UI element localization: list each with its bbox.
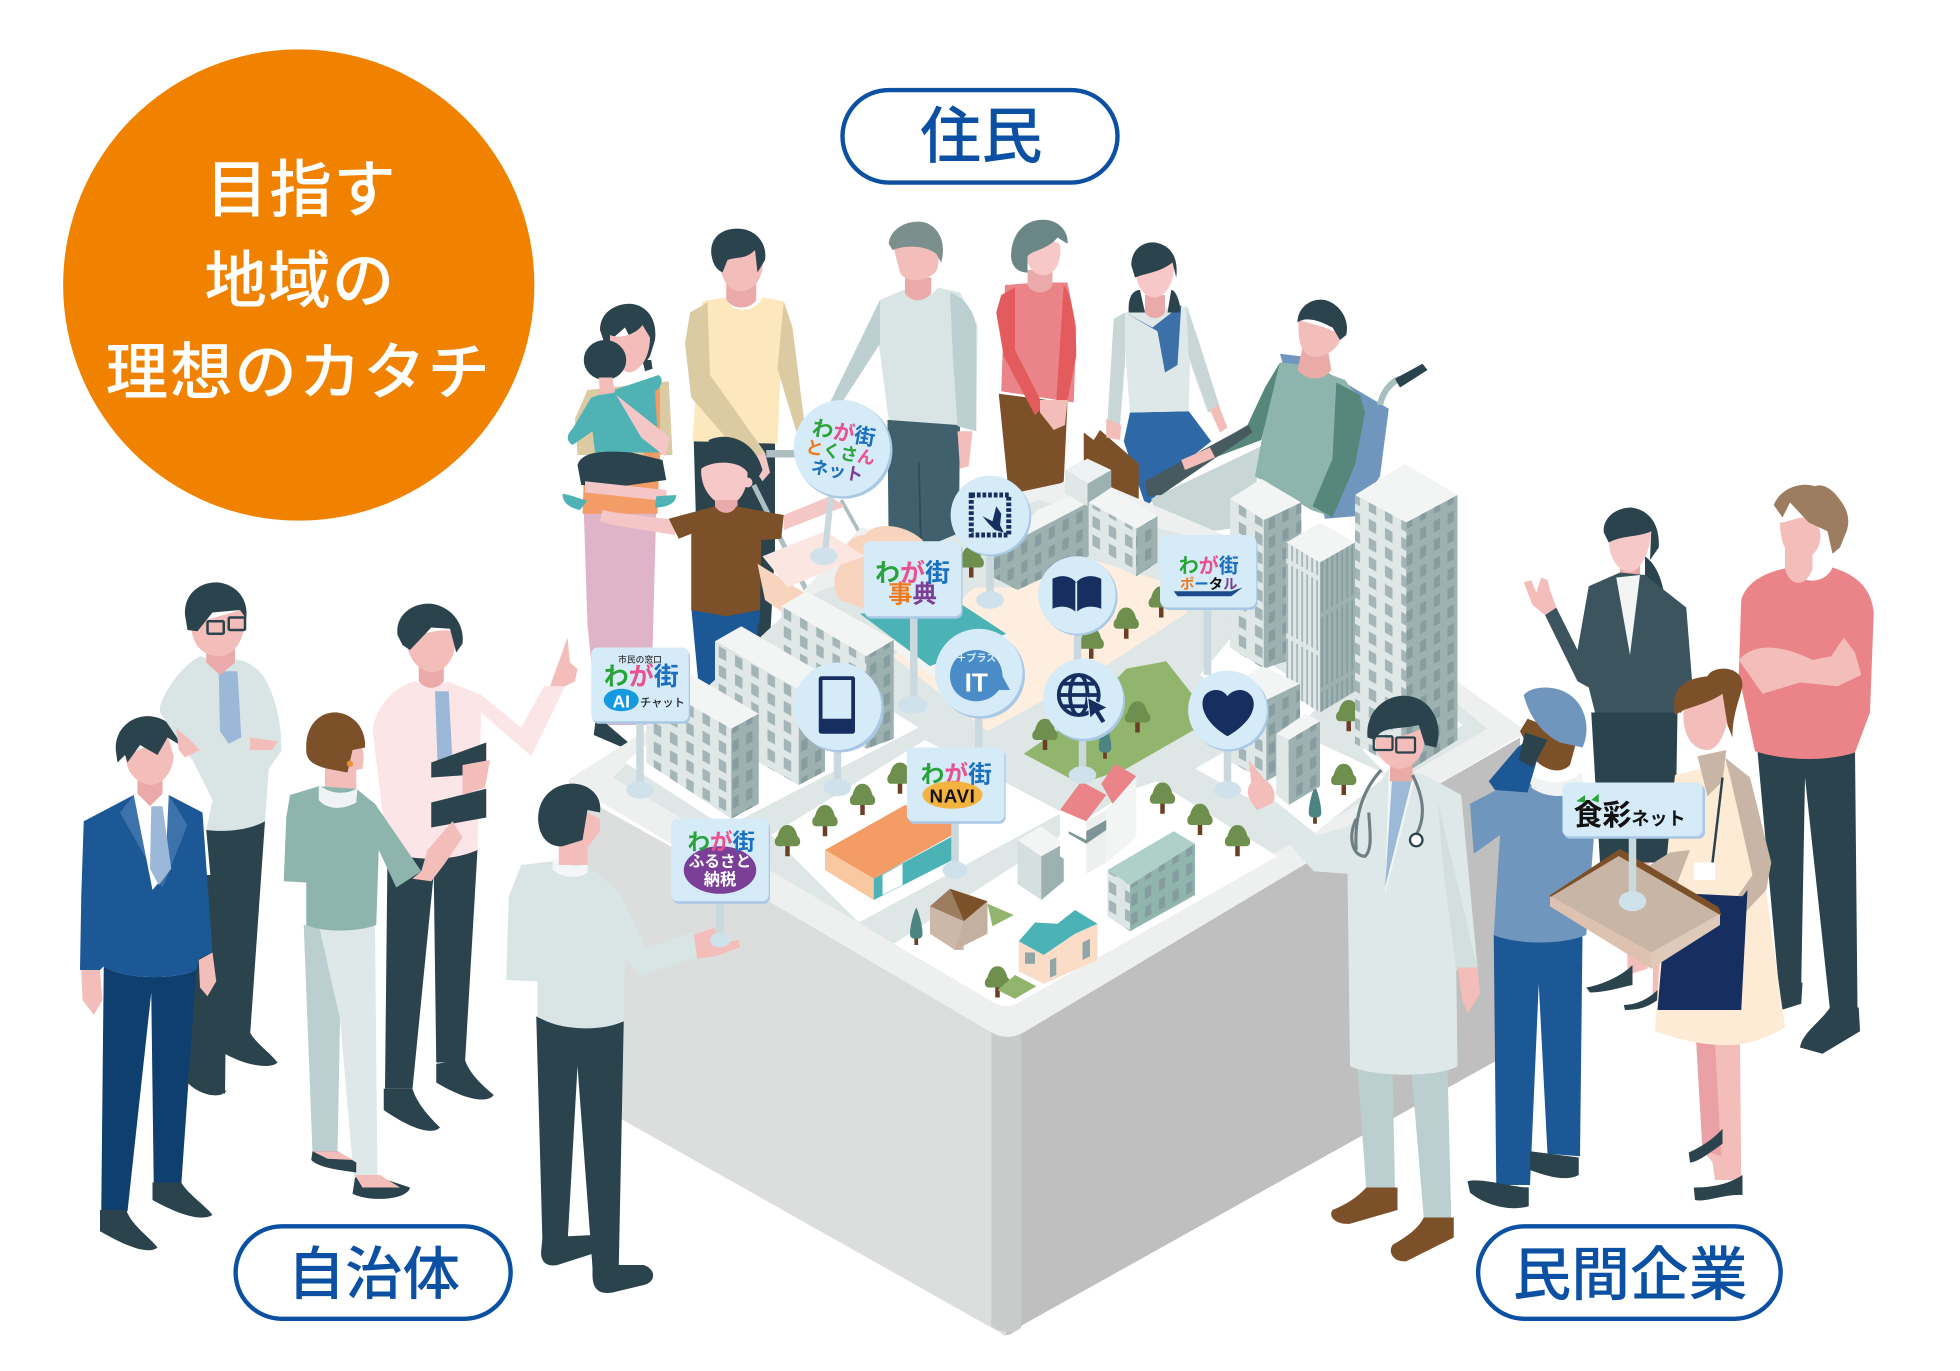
person: elderly man with walker — [830, 222, 978, 556]
building: front apartment — [646, 665, 759, 819]
building: middle apartment — [715, 626, 825, 785]
building: orange-roof store — [825, 805, 952, 900]
label: residents — [842, 90, 1118, 182]
sign: heart icon — [1188, 671, 1269, 799]
building: tower 1 — [1230, 479, 1301, 669]
sign: わが街ポータル — [1160, 535, 1258, 675]
sign: わが街事典: わが街 — [875, 558, 950, 587]
sign: わが街ポータル: わが街 — [1179, 553, 1239, 578]
sign: わが街NAVI: わが街 — [921, 760, 992, 789]
walker frame — [754, 454, 859, 592]
sign: わが街ふるさと納税: わが街 — [687, 829, 755, 855]
wheelchair frame — [1280, 354, 1389, 519]
person: boy in brown shirt — [600, 437, 845, 700]
sign: プラスIT — [935, 629, 1025, 750]
person: waitress with tray — [1640, 669, 1785, 1200]
label: private companies — [1478, 1226, 1781, 1319]
sign: 食彩ネット — [1562, 782, 1705, 911]
sign: わが街NAVI — [907, 747, 1006, 879]
person: woman in green top, back view — [284, 712, 463, 1199]
sign: わが街NAVI: NAVI — [930, 785, 975, 806]
sign: わが街とくさんネット: わが街 — [810, 415, 877, 451]
sign: わが街AIチャット: わが街 — [604, 662, 679, 691]
sign: globe cursor icon — [1043, 659, 1125, 784]
sign: わが街とくさんネット — [794, 400, 892, 565]
platform: top surface with roads — [572, 481, 1520, 1033]
sign: わが街AIチャット: 市民の窓口 — [618, 653, 662, 664]
label: residents: 住民 — [920, 102, 1042, 170]
person: elderly woman in red — [996, 220, 1076, 505]
sign: 食彩ネット: 食彩ネット — [1574, 800, 1686, 832]
building: red-roof house — [1060, 764, 1136, 874]
building: brown-roof house — [930, 889, 1014, 950]
person: mother holding child — [562, 304, 676, 746]
badge: orange circle with goal heading — [63, 49, 534, 521]
building: upper low-rise left — [994, 459, 1111, 590]
sign: mail stamp icon — [951, 476, 1031, 609]
building: teal roof hall — [860, 605, 1010, 676]
sign: わが街とくさんネット: ネット — [809, 457, 865, 486]
person: man in red with crossed arms — [1739, 485, 1874, 1054]
person: man in wheelchair — [1145, 300, 1428, 538]
label: private companies: 民間企業 — [1512, 1243, 1747, 1308]
sign: わが街ポータル: ポータル — [1180, 576, 1237, 593]
building: green apartment — [1108, 831, 1195, 931]
badge: orange circle with goal heading: 地域の — [204, 246, 396, 316]
badge: orange circle with goal heading: 目指す — [206, 155, 397, 225]
sign: わが街AIチャット: チャット — [640, 696, 685, 709]
building: grey small tower — [1018, 826, 1064, 900]
building: back apartment — [781, 591, 894, 749]
sign: わが街ふるさと納税: ふるさと — [689, 852, 751, 870]
building: teal-roof house — [998, 910, 1098, 999]
sign: smartphone icon — [794, 662, 884, 796]
person: doctor — [1248, 696, 1480, 1261]
sign: プラスIT: IT — [965, 667, 988, 697]
person: man with cap on phone — [1468, 687, 1598, 1208]
person: man with glasses, arms crossed — [160, 582, 281, 1095]
person: schoolgirl with bag — [1084, 242, 1228, 507]
building: upper low-rise right — [1089, 487, 1158, 576]
building: tower 2 — [1286, 522, 1355, 712]
sign: わが街事典 — [864, 541, 962, 714]
sign: book icon — [1038, 556, 1118, 681]
sign base held in hand — [710, 932, 730, 947]
label: municipality: 自治体 — [288, 1243, 460, 1307]
sign: わが街事典: 事典 — [888, 581, 937, 608]
building: small tower right of heart — [1276, 714, 1320, 805]
tray — [1550, 850, 1720, 969]
sign: プラスIT: ＋プラス — [956, 652, 996, 664]
sign: わが街AIチャット — [591, 648, 690, 799]
plaza: peach ground and blossom trees — [758, 526, 1188, 731]
building: behind heart sign — [1231, 666, 1300, 781]
person: man in pink shirt pointing — [373, 604, 578, 1131]
sign: わが街ふるさと納税 — [671, 819, 770, 937]
sign: わが街ふるさと納税: 納税 — [704, 871, 736, 889]
person: man in yellow sweater — [685, 229, 805, 663]
sign: わが街AIチャット: AI — [613, 691, 630, 711]
platform: base block — [588, 737, 1520, 1336]
badge: orange circle with goal heading: 理想のカタチ — [106, 338, 492, 408]
person: man in back view holding sign — [506, 784, 740, 1293]
building: tower 3 — [1355, 464, 1458, 772]
park: green lawn — [1024, 661, 1194, 784]
sign: わが街とくさんネット: とくさん — [804, 437, 877, 469]
person: suit woman — [1524, 507, 1692, 1010]
label: municipality — [236, 1226, 511, 1319]
person: man in blue suit — [80, 716, 228, 1250]
trees — [775, 546, 1361, 997]
